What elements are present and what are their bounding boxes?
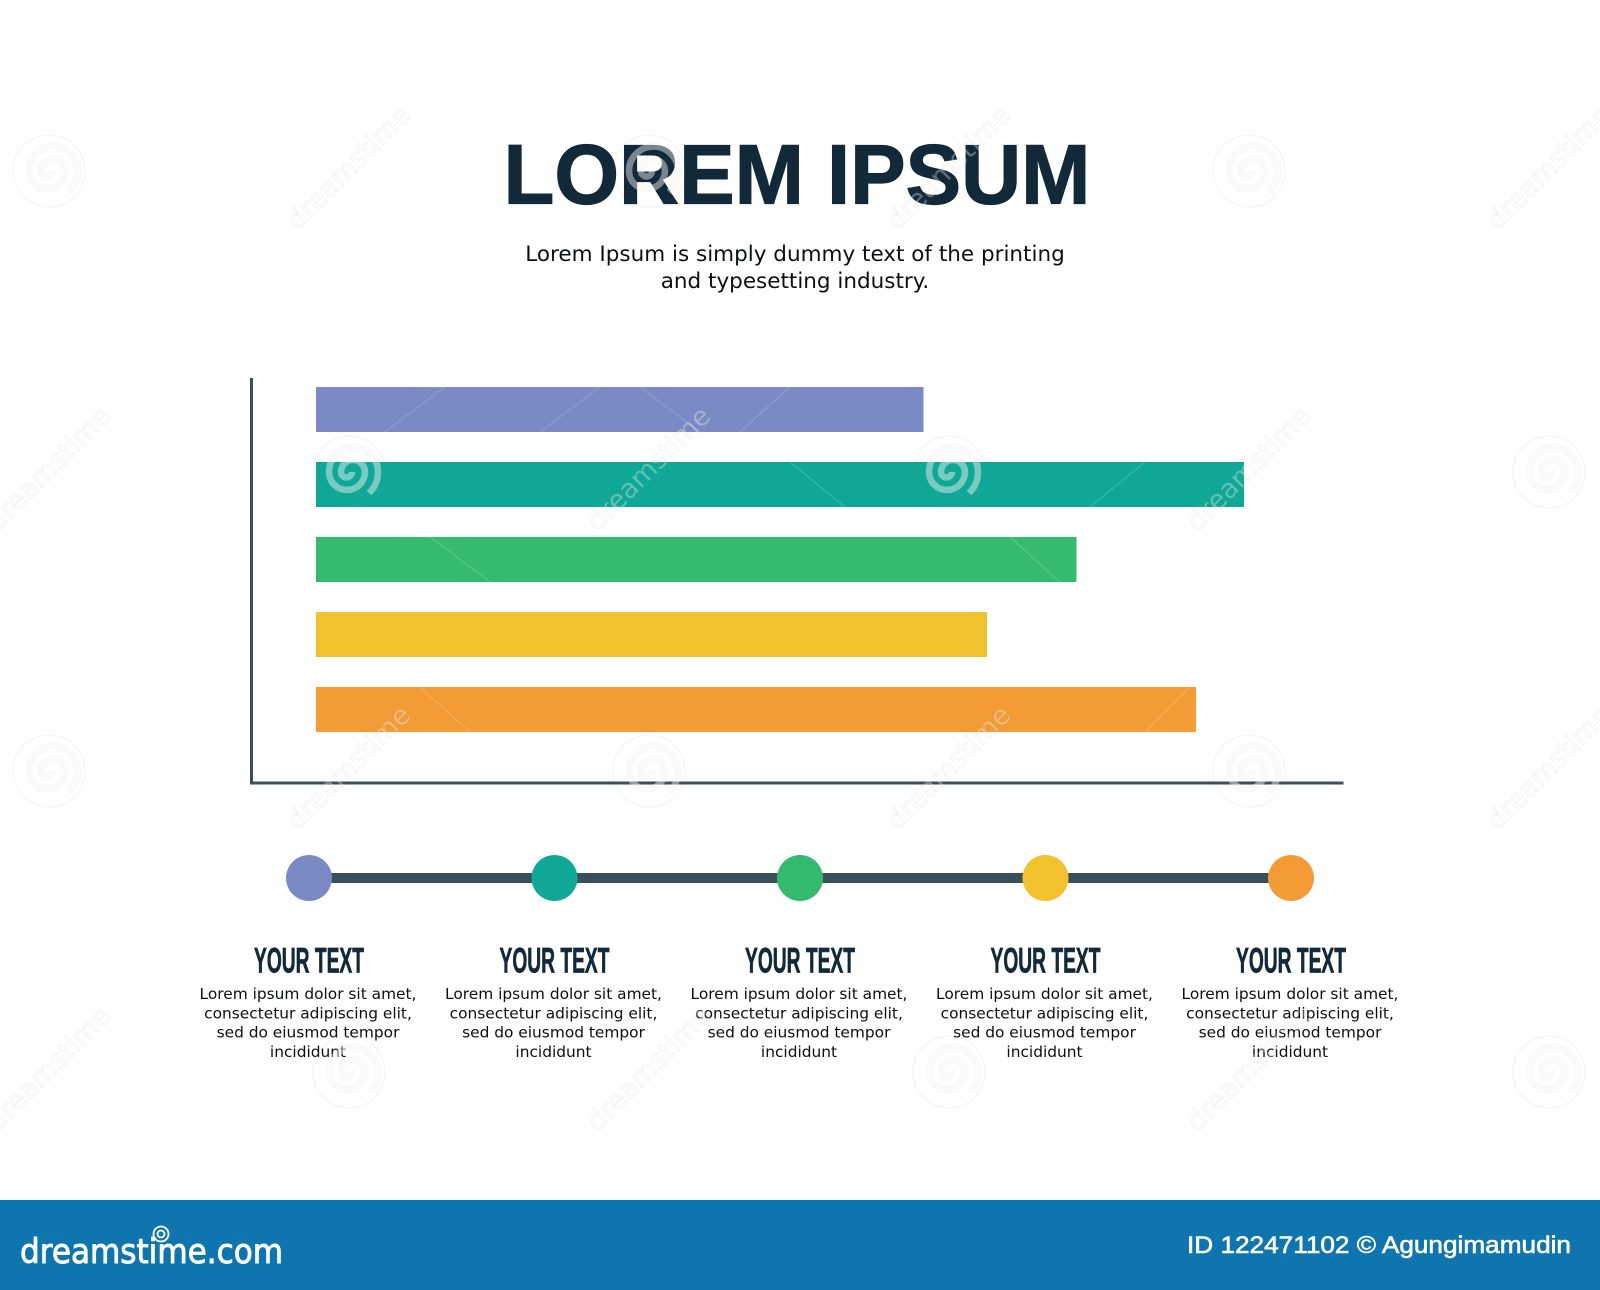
watermark overlay: dreamstime: [581, 401, 717, 537]
text column 5: incididunt: [1252, 1043, 1328, 1061]
text column 4: Lorem ipsum dolor sit amet,: [936, 985, 1153, 1003]
text column 2: YOUR TEXT: [500, 942, 610, 980]
marker: green: [777, 855, 823, 901]
text column 4: incididunt: [1006, 1043, 1083, 1061]
marker: yellow: [1022, 855, 1068, 901]
text column 1: incididunt: [270, 1043, 346, 1061]
bar chart: [252, 378, 1344, 783]
bar: purple: [316, 387, 924, 432]
text column 2: [445, 942, 662, 1061]
text column 1: consectetur adipiscing elit,: [204, 1004, 412, 1022]
text column 2: Lorem ipsum dolor sit amet,: [445, 985, 662, 1003]
text column 1: YOUR TEXT: [254, 942, 364, 980]
marker: purple: [286, 855, 332, 901]
watermark overlay: dreamstime: [881, 700, 1017, 836]
banner logo text: dreamstime.com: [20, 1232, 283, 1272]
text column 2: incididunt: [515, 1043, 592, 1061]
watermark overlay: dreamstime: [1181, 401, 1317, 537]
banner credit: ID 122471102 © Agungimamudin: [1187, 1232, 1571, 1259]
text column 3: YOUR TEXT: [745, 942, 855, 980]
marker: orange: [1268, 855, 1314, 901]
text column 1: Lorem ipsum dolor sit amet,: [200, 985, 416, 1003]
text column 5: [1182, 942, 1398, 1061]
text column 4: consectetur adipiscing elit,: [941, 1004, 1148, 1022]
subtitle: Lorem Ipsum is simply dummy text of the printing: [525, 242, 1065, 267]
text column 5: consectetur adipiscing elit,: [1186, 1004, 1394, 1022]
watermark overlay: dreamstime: [281, 100, 417, 236]
text column 3: incididunt: [761, 1043, 837, 1061]
text column 5: YOUR TEXT: [1236, 942, 1346, 980]
text column 5: sed do eiusmod tempor: [1199, 1024, 1382, 1042]
text column 5: Lorem ipsum dolor sit amet,: [1182, 985, 1398, 1003]
watermark overlay: dreamstime: [1181, 1001, 1317, 1137]
timeline: [286, 855, 1314, 901]
text column 4: YOUR TEXT: [990, 942, 1100, 980]
subtitle: and typesetting industry.: [661, 269, 929, 294]
timeline line: [309, 873, 1291, 883]
watermark overlay: dreamstime: [581, 1001, 717, 1137]
text column 1: sed do eiusmod tempor: [217, 1024, 400, 1042]
text column 3: [691, 942, 907, 1061]
subtitle: [525, 242, 1065, 294]
text column 3: Lorem ipsum dolor sit amet,: [691, 985, 907, 1003]
marker: teal: [532, 855, 578, 901]
text column 2: sed do eiusmod tempor: [462, 1024, 646, 1042]
bar: orange: [316, 687, 1196, 732]
watermark overlay: dreamstime: [281, 700, 417, 836]
bar: teal: [316, 462, 1244, 507]
text column 4: sed do eiusmod tempor: [953, 1024, 1137, 1042]
text column 3: consectetur adipiscing elit,: [695, 1004, 903, 1022]
icon: logo spiral: [154, 1226, 168, 1242]
text column 3: sed do eiusmod tempor: [708, 1024, 891, 1042]
watermark overlay: dreamstime: [881, 100, 1017, 236]
text column 2: consectetur adipiscing elit,: [450, 1004, 657, 1022]
text column 1: [200, 942, 416, 1061]
bar: yellow: [316, 612, 987, 657]
chart axes: [252, 378, 1344, 783]
text column 4: [936, 942, 1153, 1061]
footer banner: [0, 1200, 1600, 1290]
title: LOREM IPSUM: [504, 128, 1090, 222]
bar: green: [316, 537, 1076, 582]
